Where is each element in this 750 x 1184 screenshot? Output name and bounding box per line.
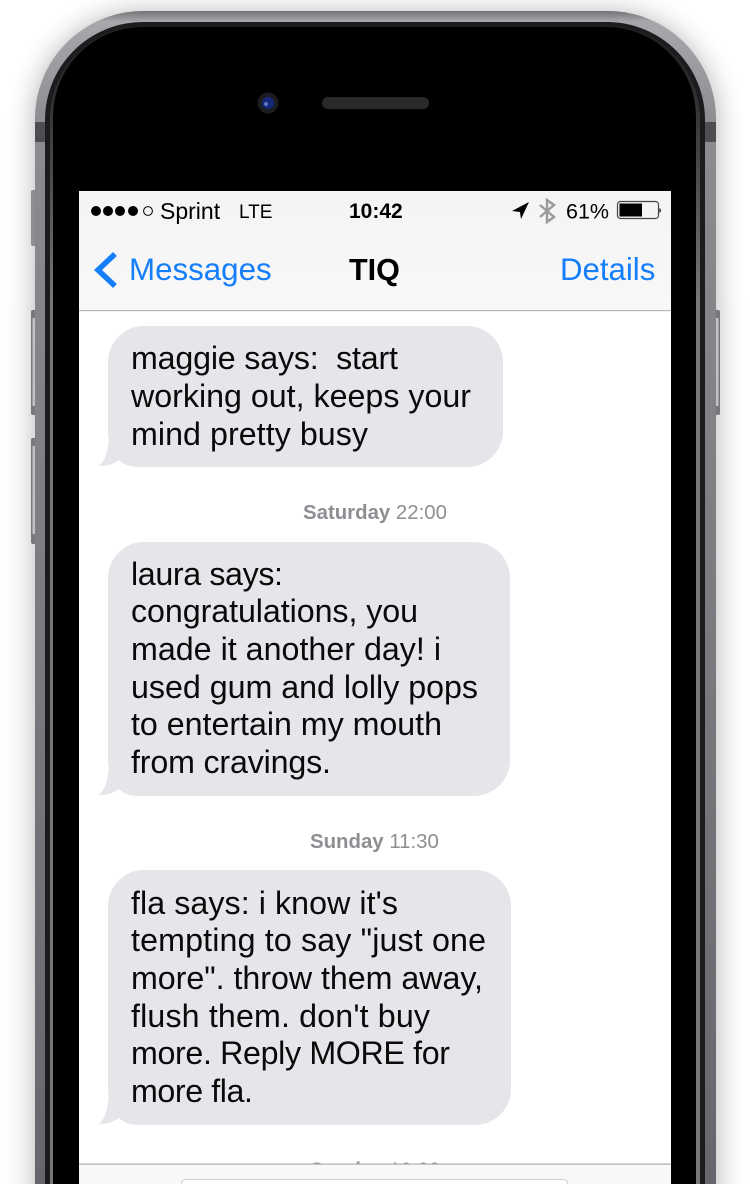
- icon: battery: [618, 202, 661, 218]
- icon: back chevron: [98, 254, 115, 286]
- battery percent: 61%: [566, 200, 609, 224]
- message bubble: maggie: maggie says: start: [131, 340, 398, 376]
- message bubble: fla: more fla.: [131, 1073, 253, 1109]
- message bubble: laura: from cravings.: [131, 744, 331, 780]
- timestamp: Saturday: Saturday 22:00: [303, 502, 447, 524]
- message bubble: laura: [99, 542, 510, 796]
- timestamp: clipped: Sunday 10:00: [310, 1160, 440, 1182]
- message list: [99, 326, 511, 1182]
- icon: location arrow: [512, 202, 529, 219]
- message bubble: laura: congratulations, you: [131, 593, 418, 629]
- message bubble: maggie: working out, keeps your: [130, 378, 471, 414]
- message bubble: maggie: mind pretty busy: [131, 416, 369, 452]
- details link: Details: [560, 252, 655, 287]
- message bubble: laura: to entertain my mouth: [131, 706, 442, 742]
- back link: Messages: [129, 252, 272, 287]
- speaker: [322, 97, 429, 109]
- network: LTE: [239, 202, 272, 223]
- message bubble: fla: more". throw them away,: [131, 960, 483, 996]
- message bubble: fla: [99, 870, 511, 1125]
- message bubble: fla: more. Reply MORE for: [131, 1035, 450, 1071]
- message input bar: [79, 1164, 671, 1184]
- message bubble: laura: laura says:: [131, 556, 283, 592]
- phone side buttons: [31, 190, 720, 544]
- screen: [79, 191, 671, 1184]
- conversation title: TIQ: [349, 253, 400, 287]
- message bubble: fla: tempting to say "just one: [131, 922, 486, 958]
- message bubble: fla: flush them. don't buy: [131, 998, 431, 1034]
- front camera: [258, 92, 278, 114]
- message bubble: fla: fla says: i know it's: [131, 885, 398, 921]
- clock: 10:42: [349, 200, 403, 223]
- message bubble: maggie: [99, 326, 503, 467]
- message bubble: laura: used gum and lolly pops: [131, 669, 478, 705]
- icon: bluetooth: [540, 200, 554, 222]
- carrier: Sprint: [160, 198, 221, 224]
- status signal dots: [91, 206, 152, 216]
- timestamp: Sunday: Sunday 11:30: [310, 831, 439, 853]
- navigation bar: [79, 191, 671, 311]
- message bubble: laura: made it another day! i: [131, 631, 441, 667]
